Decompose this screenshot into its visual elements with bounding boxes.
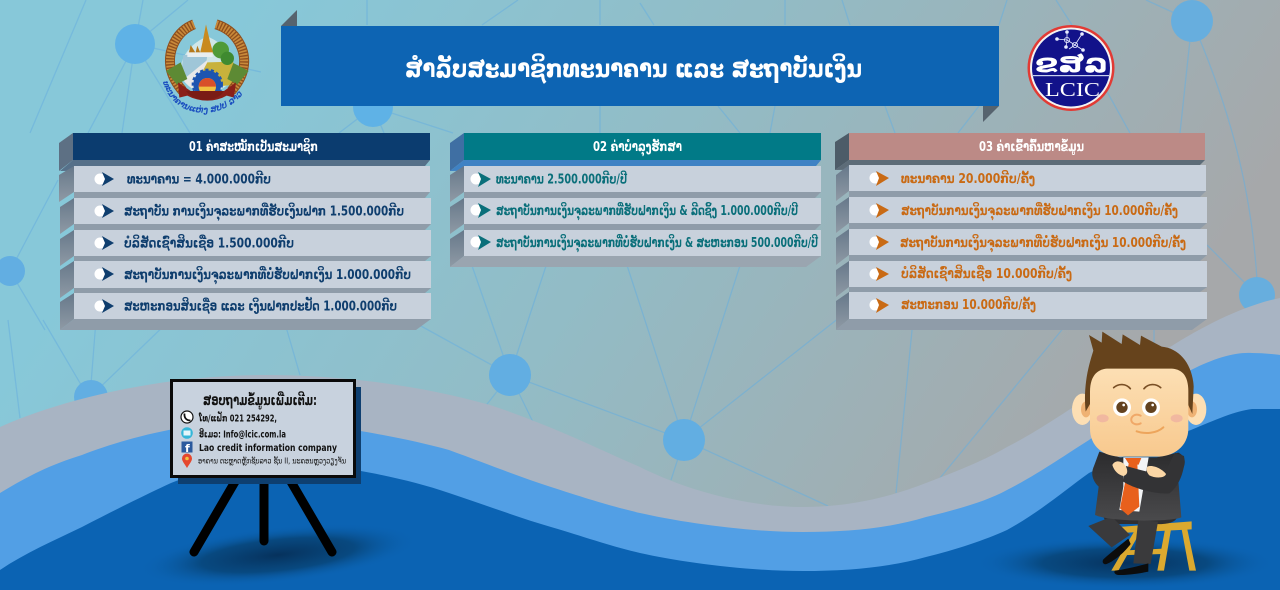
ear right bbox=[1186, 394, 1206, 425]
board heading: ສອບຖາມຂໍ້ມູນເພີ່ມເຕີມ: bbox=[203, 391, 317, 410]
row: deposit MFI bbox=[849, 197, 1207, 223]
character ground shadow bbox=[975, 537, 1275, 589]
hair bbox=[1085, 332, 1194, 414]
crossed arms bbox=[1112, 453, 1184, 494]
row: deposit-taking MFI bbox=[74, 198, 431, 224]
row: credit and saving cooperative: ສະຫະກອນສິນເຊື່ອ ແລະ ເງິນຝາກປະຢັດ 1.000.000ກີບ bbox=[124, 297, 397, 314]
panel 03 heading: 03 ຄ່າເຂົ້າຄົ້ນຫາຂໍ້ມູນ bbox=[979, 139, 1084, 155]
row: deposit-taking MFI: ສະຖາບັນ ການເງິນຈຸລະພາກທີ່ຮັບເງິນຝາກ 1.500.000ກີບ bbox=[124, 203, 404, 220]
row: leasing: ບໍລິສັດເຊົ່າສິນເຊື່ອ 1.500.000ກີບ bbox=[124, 235, 294, 252]
wave: light blue band bbox=[0, 353, 1280, 590]
row: non deposit MFI bbox=[849, 229, 1207, 255]
network icon bbox=[1056, 31, 1084, 51]
logo Lao letters: ຂສລ bbox=[1035, 49, 1108, 79]
row: banks: ທະນາຄານ = 4.000.000ກີບ bbox=[127, 172, 271, 188]
wave: dark blue base bbox=[0, 409, 1280, 590]
row: leasing: ບໍລິສັດເຊົ່າສິນເຊື່ອ 10.000ກີບ/ຄັ້ງ bbox=[901, 266, 1072, 282]
row: leasing bbox=[74, 230, 431, 256]
character: businessman on stool bbox=[1072, 332, 1206, 575]
stool bbox=[1111, 521, 1196, 571]
row: deposit MFI: ສະຖາບັນການເງິນຈຸລະພາກທີ່ຮັບຝາກເງິນ 10.000ກີບ/ຄັ້ງ bbox=[901, 203, 1178, 220]
panel 01 heading: 01 ຄ່າສະໝັກເປັນສະມາຊິກ bbox=[189, 139, 318, 155]
row: deposit MFI and leasing: ສະຖາບັນການເງິນຈຸລະພາກທີ່ຮັບຝາກເງິນ & ລີດຊິ້ງ 1.000.000ກີບ/ປີ bbox=[496, 203, 799, 220]
row: credit and saving cooperative bbox=[74, 293, 431, 319]
icon: phone bbox=[181, 411, 193, 423]
row: banks bbox=[74, 166, 430, 192]
logo Latin letters: LCIC bbox=[1045, 79, 1100, 101]
row: cooperative bbox=[849, 292, 1207, 319]
row: cooperative: ສະຫະກອນ 10.000ກີບ/ຄັ້ງ bbox=[901, 297, 1036, 313]
row: deposit MFI and leasing bbox=[464, 198, 821, 224]
row: non deposit MFI and cooperative: ສະຖາບັນການເງິນຈຸລະພາກທີ່ບໍ່ຮັບຝາກເງິນ & ສະຫະກອນ 500.000ກີບ/ປີ bbox=[496, 235, 819, 252]
panel 02 heading: 02 ຄ່າບຳລຸງຮັກສາ bbox=[593, 139, 682, 156]
row: banks: ທະນາຄານ 20.000ກີບ/ຄັ້ງ bbox=[901, 171, 1035, 187]
row: banks bbox=[849, 165, 1206, 191]
logo caption: ທະນາຄານແຫ່ງ ສປປ ລາວ bbox=[163, 81, 242, 115]
title banner bbox=[281, 10, 999, 122]
ear left bbox=[1072, 394, 1093, 425]
logo: Bank of Lao PDR emblem bbox=[166, 24, 249, 101]
logo: LCIC bbox=[1028, 25, 1114, 111]
crossed legs bbox=[1088, 517, 1177, 575]
row: non deposit MFI bbox=[74, 261, 431, 288]
face bbox=[1090, 369, 1188, 457]
row: non deposit MFI and cooperative bbox=[464, 230, 821, 256]
icon: facebook: f bbox=[185, 442, 190, 455]
easel legs bbox=[194, 480, 332, 552]
shirt bbox=[1119, 457, 1149, 512]
banner fold left bbox=[281, 10, 297, 26]
panel: 02 maintenance fee bbox=[450, 133, 821, 267]
row: leasing bbox=[849, 261, 1207, 287]
row: non deposit MFI: ສະຖາບັນການເງິນຈຸລະພາກທີ່ບໍ່ຮັບຝາກເງິນ 1.000.000ກີບ bbox=[124, 267, 411, 284]
brows, nose and smile bbox=[1114, 385, 1163, 433]
email text: ອີເມວ: Info@lcic.com.la bbox=[199, 428, 286, 440]
banner fold right bbox=[983, 106, 999, 122]
panel: 01 membership fee bbox=[59, 133, 431, 330]
jacket bbox=[1092, 452, 1185, 521]
facebook text: Lao credit information company bbox=[199, 443, 338, 454]
row: banks bbox=[464, 166, 821, 192]
tie bbox=[1120, 458, 1141, 515]
panel 01 base bbox=[59, 133, 431, 330]
address text: ອາຄານ ຕະຫຼາດຫຼັກຊັບລາວ ຊັ້ນ II, ນະຄອນຫຼວງວຽງຈັນ bbox=[198, 455, 346, 466]
contact board on easel bbox=[172, 380, 361, 552]
cheeks bbox=[1097, 414, 1183, 422]
panel 03 base bbox=[835, 133, 1207, 330]
phone text: ໂທ/ແຟັກ 021 254292, bbox=[198, 411, 277, 424]
row: non deposit MFI: ສະຖາບັນການເງິນຈຸລະພາກທີ່ບໍ່ຮັບຝາກເງິນ 10.000ກີບ/ຄັ້ງ bbox=[900, 235, 1186, 252]
eyes bbox=[1113, 398, 1160, 416]
icon: mail bbox=[181, 427, 193, 439]
wave: grey band bbox=[0, 298, 1280, 590]
panel 02 base bbox=[450, 133, 821, 267]
panel: 03 search fee bbox=[835, 133, 1207, 330]
icon: location pin bbox=[182, 454, 192, 468]
row: banks: ທະນາຄານ 2.500.000ກີບ/ປີ bbox=[496, 172, 628, 188]
easel ground shadow bbox=[136, 513, 420, 590]
icon: facebook bbox=[182, 442, 192, 455]
title: ສຳລັບສະມາຊິກທະນາຄານ ແລະ ສະຖາບັນເງິນ bbox=[405, 52, 862, 84]
